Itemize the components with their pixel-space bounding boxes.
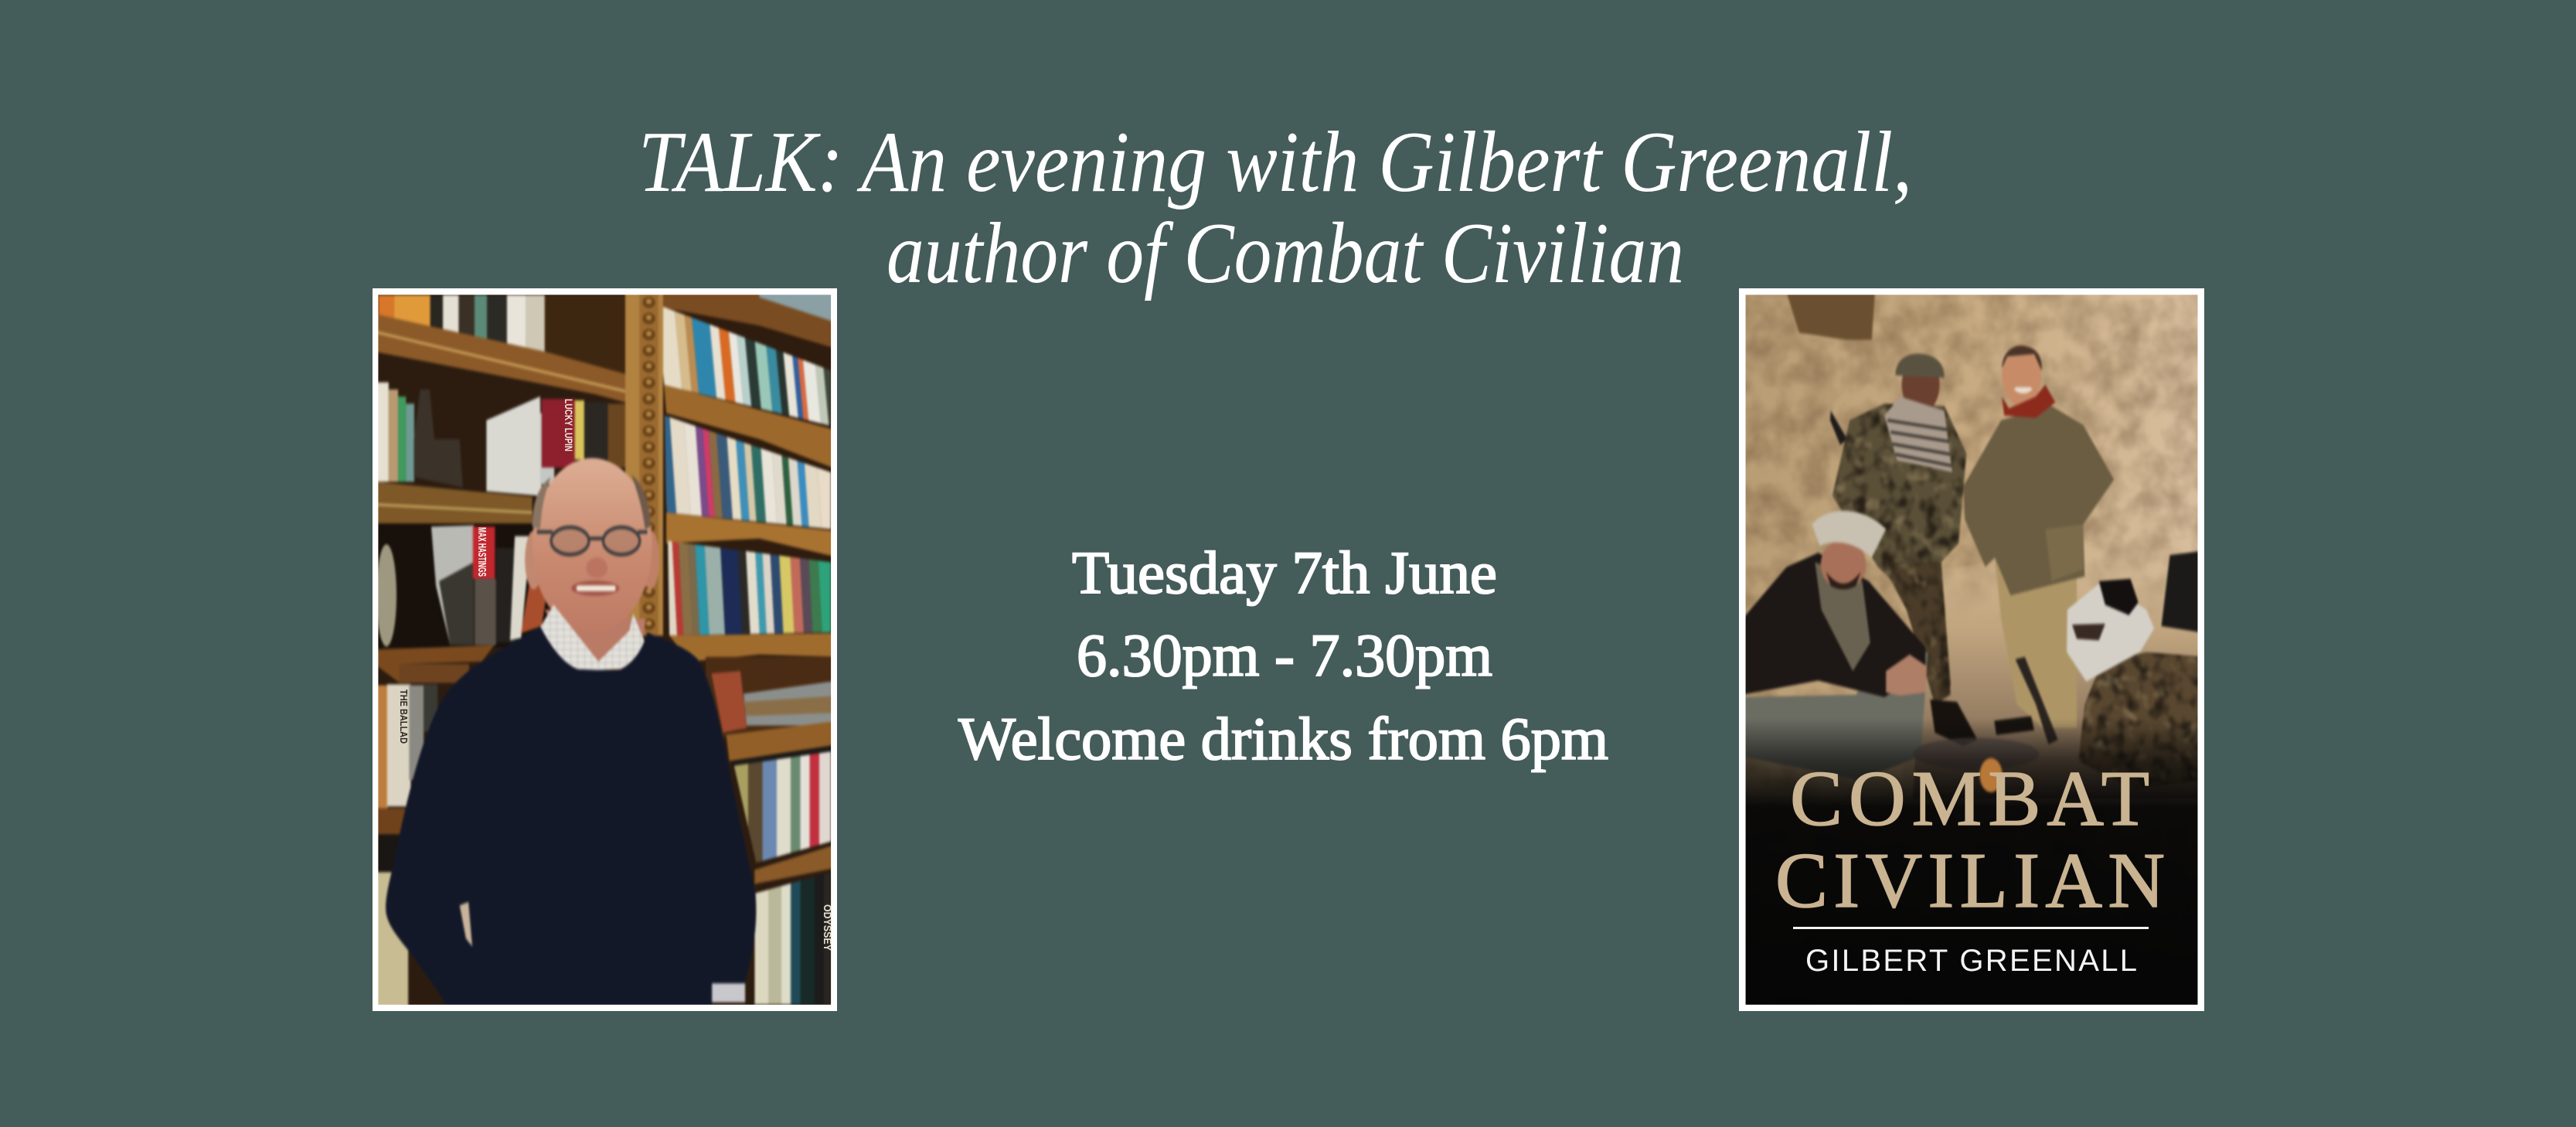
title: TALK: An evening with Gilbert Greenall, (638, 114, 1912, 210)
cover photo: rifle (2016, 657, 2058, 744)
photo: author in front of bookshelves (371, 278, 859, 1014)
event details: Tuesday 7th June (1072, 539, 1497, 606)
book cover: Combat Civilian (1739, 285, 2206, 1014)
cover photo: Gilbert Greenall standing (1963, 345, 2114, 735)
cover author name: GILBERT GREENALL (1805, 944, 2137, 978)
cover photo: folding chair (2160, 549, 2198, 634)
author: shirt cuff (712, 983, 745, 1003)
cover title: CIVILIAN (1775, 837, 2165, 924)
cover photo: seated man in pakol (1742, 511, 1928, 780)
cover title: COMBAT (1790, 755, 2149, 843)
title (638, 114, 1912, 301)
cover photo: crouching man in turban (2067, 579, 2206, 789)
book spine titles in the photo: THE BALLAD (398, 689, 410, 744)
cover photo: ground (1914, 566, 2198, 798)
title: author of Combat Civilian (886, 206, 1684, 301)
author: navy sweater (386, 626, 756, 1014)
author: hand gap (460, 902, 472, 946)
cover rule (1793, 927, 2149, 929)
author: neck (545, 610, 646, 671)
event details: 6.30pm - 7.30pm (1077, 621, 1492, 689)
book spine titles in the photo: MAX HASTINGS (475, 527, 488, 577)
cover photo: dark fade (1739, 718, 2203, 1014)
author: shirt collar (540, 604, 649, 671)
cover photo: campfire (1979, 758, 2003, 792)
event details (958, 539, 1608, 772)
event details: Welcome drinks from 6pm (958, 705, 1608, 772)
book spine titles in the photo: LUCKY LUPIN (563, 399, 575, 451)
cover photo: mud bricks (1787, 292, 1875, 340)
book spine titles in the photo (398, 399, 834, 952)
cover title (1775, 755, 2165, 924)
book spine titles in the photo: ODYSSEY (822, 904, 834, 952)
cover photo: desert wall backdrop (1745, 295, 2198, 804)
cover photo: soldier (1830, 354, 1978, 746)
cover photo: dark puddle (1913, 737, 2039, 770)
author: head (525, 458, 659, 633)
